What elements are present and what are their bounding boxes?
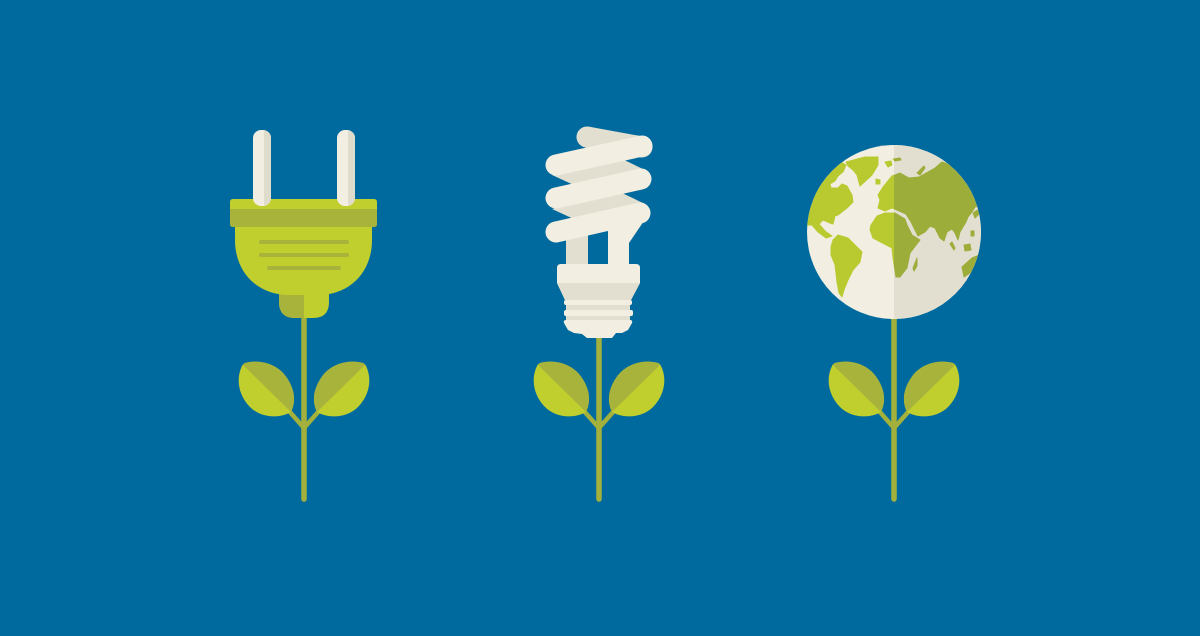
stem and leaves: bulb (534, 318, 664, 499)
stem and leaves: globe (829, 318, 959, 499)
plant: light bulb (534, 137, 664, 499)
continents: light half (807, 156, 894, 298)
illustration: three energy plants (230, 126, 981, 502)
plant: plug (230, 130, 377, 499)
icon: globe (800, 145, 985, 319)
continents: shaded half (894, 158, 980, 278)
stem and leaves: plug (239, 318, 369, 499)
icon: spiral bulb (552, 137, 650, 338)
icon: plug body (230, 199, 377, 318)
icon: plug prongs (253, 130, 355, 206)
plant: globe (800, 145, 985, 499)
